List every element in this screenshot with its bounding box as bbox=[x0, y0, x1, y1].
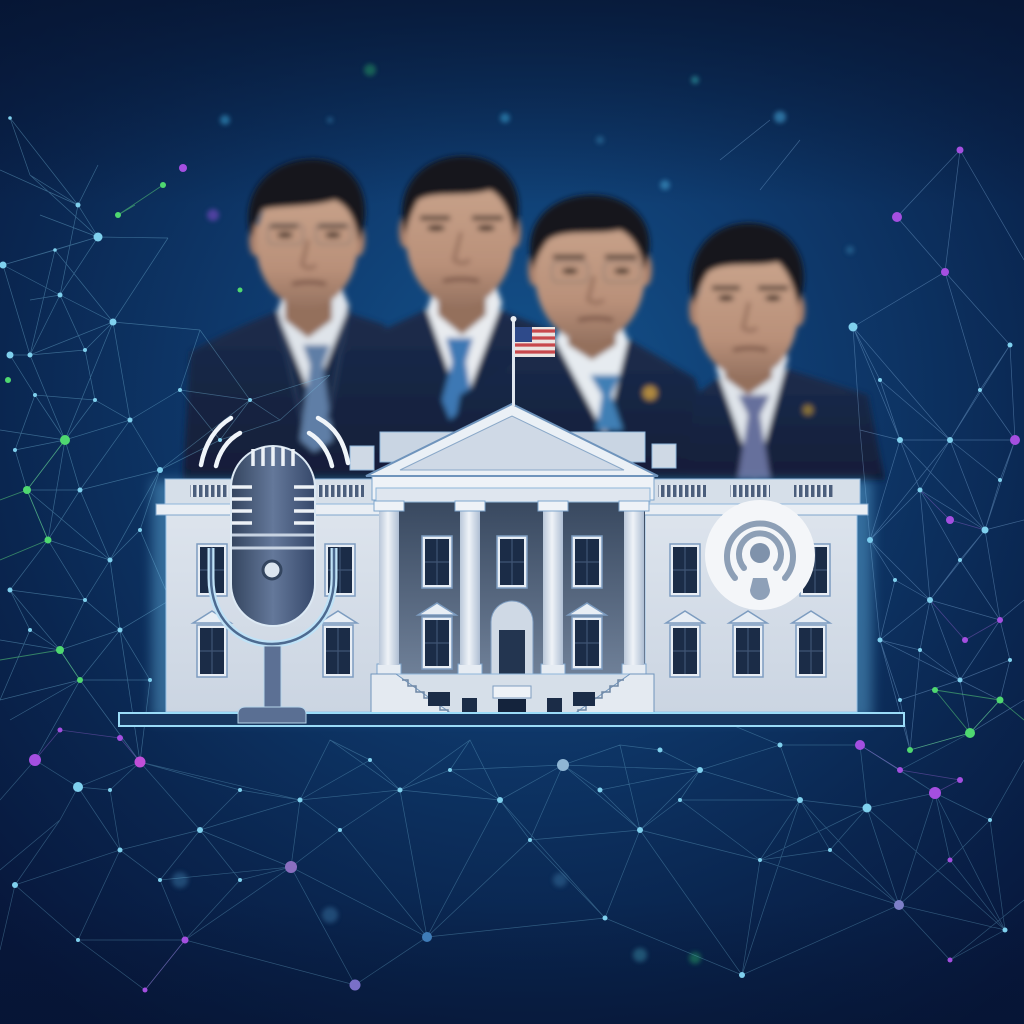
wing windows bbox=[193, 544, 830, 677]
base platform bbox=[119, 713, 904, 726]
central portico bbox=[380, 432, 645, 675]
capsule bbox=[231, 446, 315, 626]
button bbox=[263, 561, 281, 579]
figure 2 bbox=[335, 156, 565, 480]
stand base bbox=[238, 707, 306, 723]
figure 3 bbox=[445, 195, 725, 480]
podcast badge bbox=[705, 500, 815, 610]
network nodes: purple bbox=[29, 146, 1020, 992]
entrance steps bbox=[371, 674, 654, 724]
network nodes: green bbox=[5, 182, 1004, 753]
pediment bbox=[366, 404, 658, 502]
microphone bbox=[201, 418, 348, 723]
flag on pole bbox=[510, 316, 555, 406]
figure 4 bbox=[685, 223, 885, 480]
sound waves bbox=[201, 418, 348, 466]
left wing bbox=[156, 479, 384, 712]
network lines: bottom bbox=[0, 720, 1024, 990]
grille bbox=[232, 447, 314, 523]
network lines: left and top bbox=[0, 118, 330, 762]
right wing bbox=[350, 444, 868, 712]
cradle bbox=[211, 548, 334, 644]
network lines: right bbox=[720, 120, 1024, 750]
building glow bbox=[152, 480, 872, 720]
officials: blurred group of four figures bbox=[183, 156, 885, 480]
network lines: accent green and purple bbox=[0, 185, 1024, 750]
figure 1 bbox=[183, 159, 400, 480]
stand bbox=[264, 646, 281, 708]
blurred background particles bbox=[172, 64, 854, 964]
band bbox=[232, 535, 314, 548]
government building bbox=[119, 404, 904, 726]
columns bbox=[374, 501, 649, 674]
